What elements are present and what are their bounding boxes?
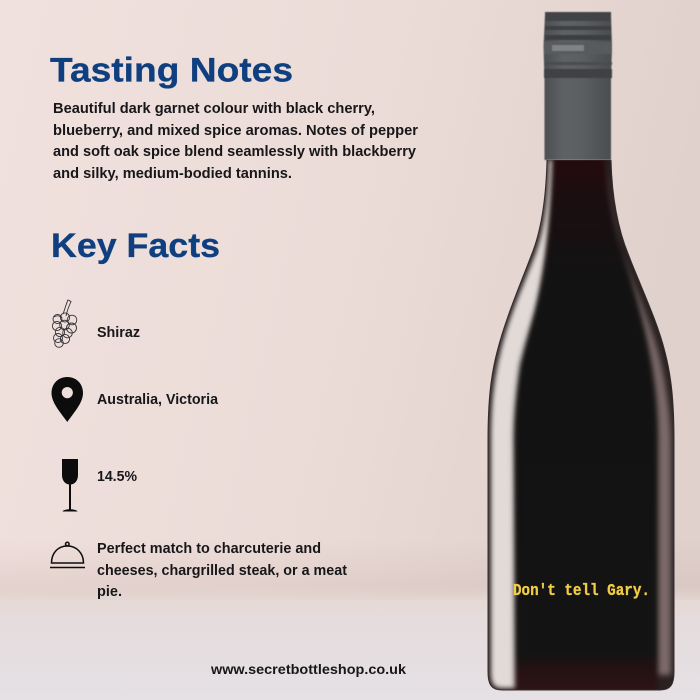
screwcap — [544, 12, 612, 160]
dark liquid — [514, 150, 658, 700]
bottle edge outline — [488, 160, 674, 690]
tasting notes paragraph: Beautiful dark garnet colour with black cherry, — [53, 101, 375, 117]
floor surface — [0, 585, 700, 700]
website url: www.secretbottleshop.co.uk — [210, 662, 407, 677]
tasting notes paragraph — [53, 101, 418, 182]
icon: serving cloche — [50, 542, 85, 568]
label: Shiraz: Shiraz — [97, 325, 140, 341]
tasting notes paragraph: and silky, medium-bodied tannins. — [53, 166, 292, 182]
bottle label text: Don't tell Gary. — [513, 582, 650, 601]
icon: location pin — [52, 377, 83, 422]
heading: Key Facts: Key Facts — [51, 227, 220, 265]
wall shade near floor — [0, 540, 700, 600]
wine bottle — [480, 12, 680, 700]
tasting notes paragraph: and soft oak spice blend seamlessly with blackberry — [53, 144, 416, 160]
icon: grapes — [52, 300, 77, 347]
right reflection — [604, 160, 671, 675]
bottle body — [488, 160, 674, 690]
food pairing text: pie. — [97, 584, 122, 600]
title: Tasting Notes: Tasting Notes — [50, 52, 293, 90]
label: alcohol percentage: 14.5% — [97, 469, 137, 485]
left highlight — [491, 160, 554, 688]
food pairing text: cheeses, chargrilled steak, or a meat — [97, 563, 347, 579]
icon: wine glass — [62, 459, 78, 512]
label: Australia, Victoria: Australia, Victoria — [97, 392, 219, 408]
tasting notes paragraph: blueberry, and mixed spice aromas. Notes of pepper — [53, 123, 418, 139]
food pairing text: Perfect match to charcuterie and — [97, 541, 321, 557]
food pairing text — [97, 541, 347, 600]
